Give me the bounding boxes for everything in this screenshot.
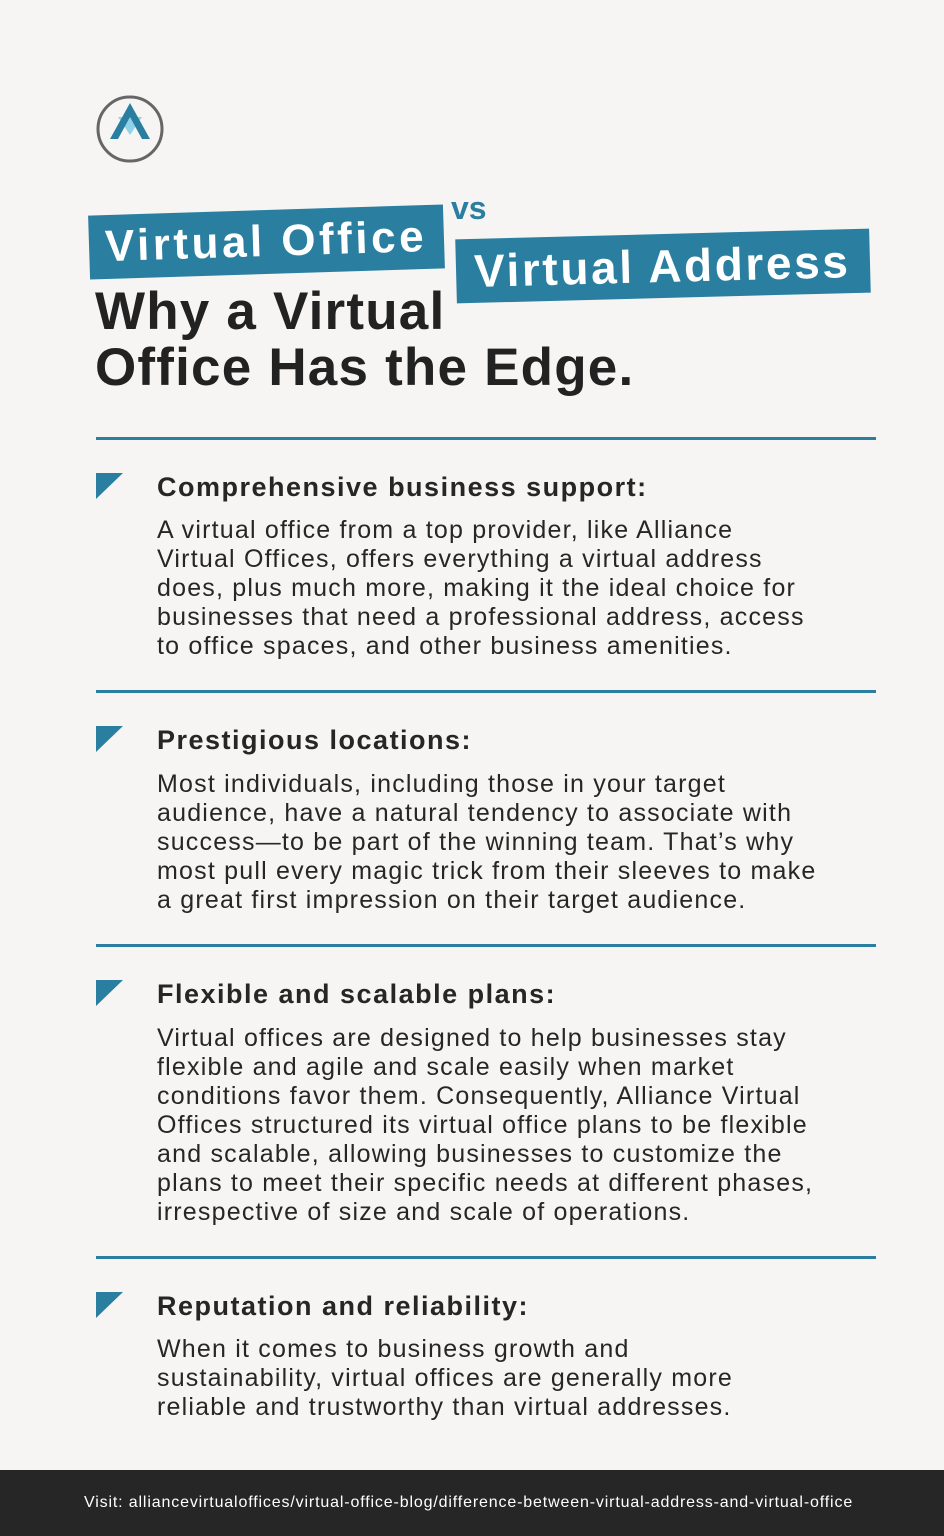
text block 2: success—to be part of the winning team. That’s why — [157, 828, 794, 856]
footer — [0, 1470, 944, 1536]
heading: Prestigious: Prestigious locations: — [157, 725, 472, 755]
title tag: Virtual Address: Virtual Address — [473, 235, 851, 297]
title: Office Has the Edge. — [95, 338, 634, 397]
text block 4: reliable and trustworthy than virtual addresses. — [157, 1393, 732, 1421]
footer: Visit: alliancevirtualoffices/virtual-office-blog/difference-between-virtual-address-and-virtual-office — [84, 1494, 853, 1511]
text block 3: Offices structured its virtual office plans to be flexible — [157, 1111, 808, 1139]
text block 1: Virtual Offices, offers everything a virtual address — [157, 545, 763, 573]
text block 4: When it comes to business growth and — [157, 1335, 630, 1363]
icon: triangle — [96, 980, 123, 1006]
text block 3: conditions favor them. Consequently, Alliance Virtual — [157, 1082, 801, 1110]
icon: triangle — [96, 726, 123, 752]
title tag: Virtual Office: Virtual Office — [104, 212, 428, 271]
text block 1: businesses that need a professional address, access — [157, 603, 805, 631]
text block 3: irrespective of size and scale of operations. — [157, 1198, 690, 1226]
heading: Reputation: Reputation and reliability: — [157, 1291, 529, 1321]
vs: vs — [451, 190, 487, 226]
text block 2: Most individuals, including those in your target — [157, 770, 726, 798]
text block 1: A virtual office from a top provider, like Alliance — [157, 516, 733, 544]
icon: triangle — [96, 473, 123, 499]
heading: Flexible: Flexible and scalable plans: — [157, 979, 556, 1009]
title: Why a Virtual — [95, 282, 445, 341]
heading: Comprehensive: Comprehensive business support: — [157, 472, 648, 502]
text block 3: flexible and agile and scale easily when market — [157, 1053, 735, 1081]
text block 4 — [157, 1335, 733, 1421]
text block 3: plans to meet their specific needs at different phases, — [157, 1169, 813, 1197]
text block 2: a great first impression on their target audience. — [157, 886, 746, 914]
text block 3: and scalable, allowing businesses to customize the — [157, 1140, 783, 1168]
icon: triangle — [96, 1292, 123, 1318]
logo — [96, 96, 164, 162]
text block 3 — [157, 1024, 813, 1226]
text block 3: Virtual offices are designed to help businesses stay — [157, 1024, 787, 1052]
text block 2: audience, have a natural tendency to associate with — [157, 799, 792, 827]
text block 4: sustainability, virtual offices are generally more — [157, 1364, 733, 1392]
text block 2 — [157, 770, 816, 914]
title — [95, 282, 634, 397]
text block 1: does, plus much more, making it the ideal choice for — [157, 574, 796, 602]
text block 2: most pull every magic trick from their sleeves to make — [157, 857, 816, 885]
text block 1 — [157, 516, 805, 660]
text block 1: to office spaces, and other business amenities. — [157, 632, 733, 660]
